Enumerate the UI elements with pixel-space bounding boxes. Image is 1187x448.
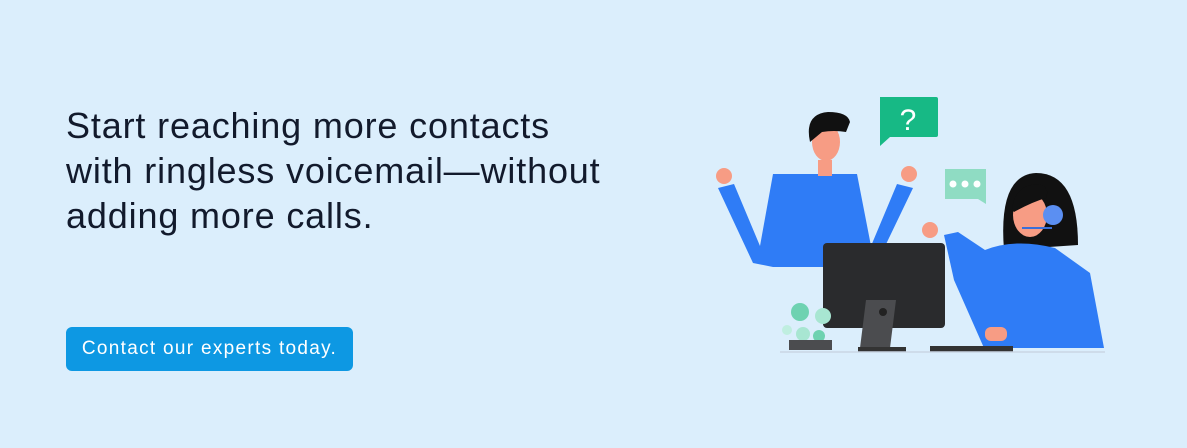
heading: with ringless voicemail—without (66, 150, 601, 191)
heading: adding more calls. (66, 195, 373, 236)
bubble: question (880, 97, 938, 146)
button: contact (66, 327, 353, 371)
heading (66, 105, 601, 236)
woman (922, 173, 1104, 348)
bubble: dots (945, 169, 986, 204)
keyboard (930, 346, 1013, 352)
man (716, 112, 917, 267)
bubble: question: ? (900, 104, 916, 137)
monitor (823, 243, 945, 352)
button: contact: Contact our experts today. (82, 338, 337, 359)
heading: Start reaching more contacts (66, 105, 550, 146)
plant (782, 303, 832, 350)
